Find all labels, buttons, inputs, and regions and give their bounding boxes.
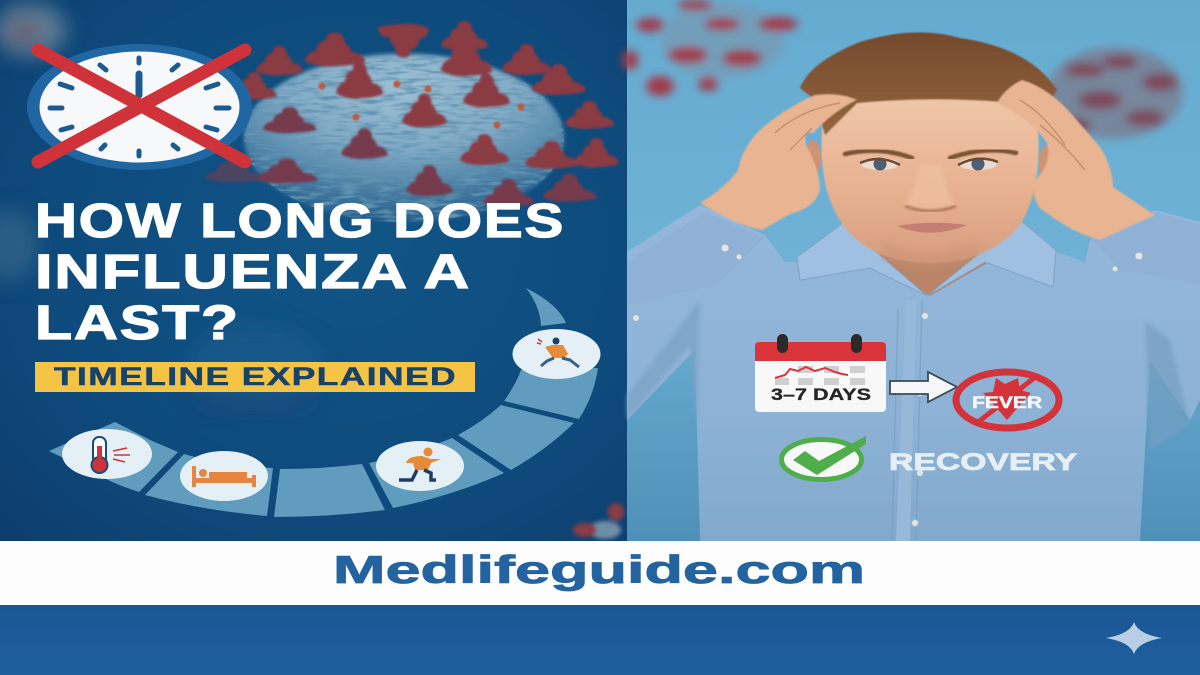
timeline stage: bed rest xyxy=(180,451,268,501)
blurred virus, bottom right of left panel xyxy=(573,503,624,539)
icon: calendar 3-7 days xyxy=(755,334,886,412)
illustration: man with headache xyxy=(627,32,1200,541)
man: neck xyxy=(845,215,1020,296)
background: blurred virus right side xyxy=(1047,47,1183,139)
man: shirt body and sleeves xyxy=(627,205,1200,541)
panel: left dark blue background xyxy=(0,0,627,541)
label: recovery: RECOVERY xyxy=(889,449,1077,476)
background: blurred viruses on left panel xyxy=(0,4,320,408)
illustration: influenza virus xyxy=(206,21,619,222)
man: buttons xyxy=(632,244,1143,526)
man: right hand xyxy=(997,80,1155,240)
timeline arc xyxy=(49,288,598,517)
man: left hand xyxy=(700,94,857,230)
title xyxy=(35,195,565,350)
icon: clock crossed out xyxy=(27,44,252,170)
panel: white website band xyxy=(0,541,1200,605)
timeline stage: walking person xyxy=(376,441,464,491)
icon: recovery check mark xyxy=(782,436,866,480)
subtitle banner xyxy=(35,362,475,392)
arrow: calendar to fever xyxy=(890,372,957,402)
panel: bottom blue band xyxy=(0,605,1200,675)
icon: calendar 3-7 days: 3–7 DAYS xyxy=(771,386,871,404)
timeline stage: running person xyxy=(512,329,600,379)
title: HOW LONG DOES xyxy=(35,195,565,248)
icon: no fever xyxy=(956,372,1059,428)
man: face details xyxy=(845,150,1016,266)
icon: no fever: FEVER xyxy=(972,393,1042,412)
timeline stage: fever thermometer xyxy=(62,429,152,479)
man: ears xyxy=(805,140,1055,181)
man: head xyxy=(821,90,1039,263)
man: hair xyxy=(800,32,1057,135)
title: INFLUENZA A xyxy=(35,246,471,299)
website name: Medlifeguide.com xyxy=(333,549,865,592)
title: LAST? xyxy=(35,297,240,350)
man: finger lines xyxy=(775,100,1085,170)
background: blurred virus top of right panel xyxy=(622,0,798,96)
icon: sparkle star xyxy=(1106,622,1162,654)
subtitle banner: TIMELINE EXPLAINED xyxy=(54,363,457,391)
man: collar xyxy=(797,220,1056,296)
panel: right light blue background xyxy=(627,0,1200,541)
